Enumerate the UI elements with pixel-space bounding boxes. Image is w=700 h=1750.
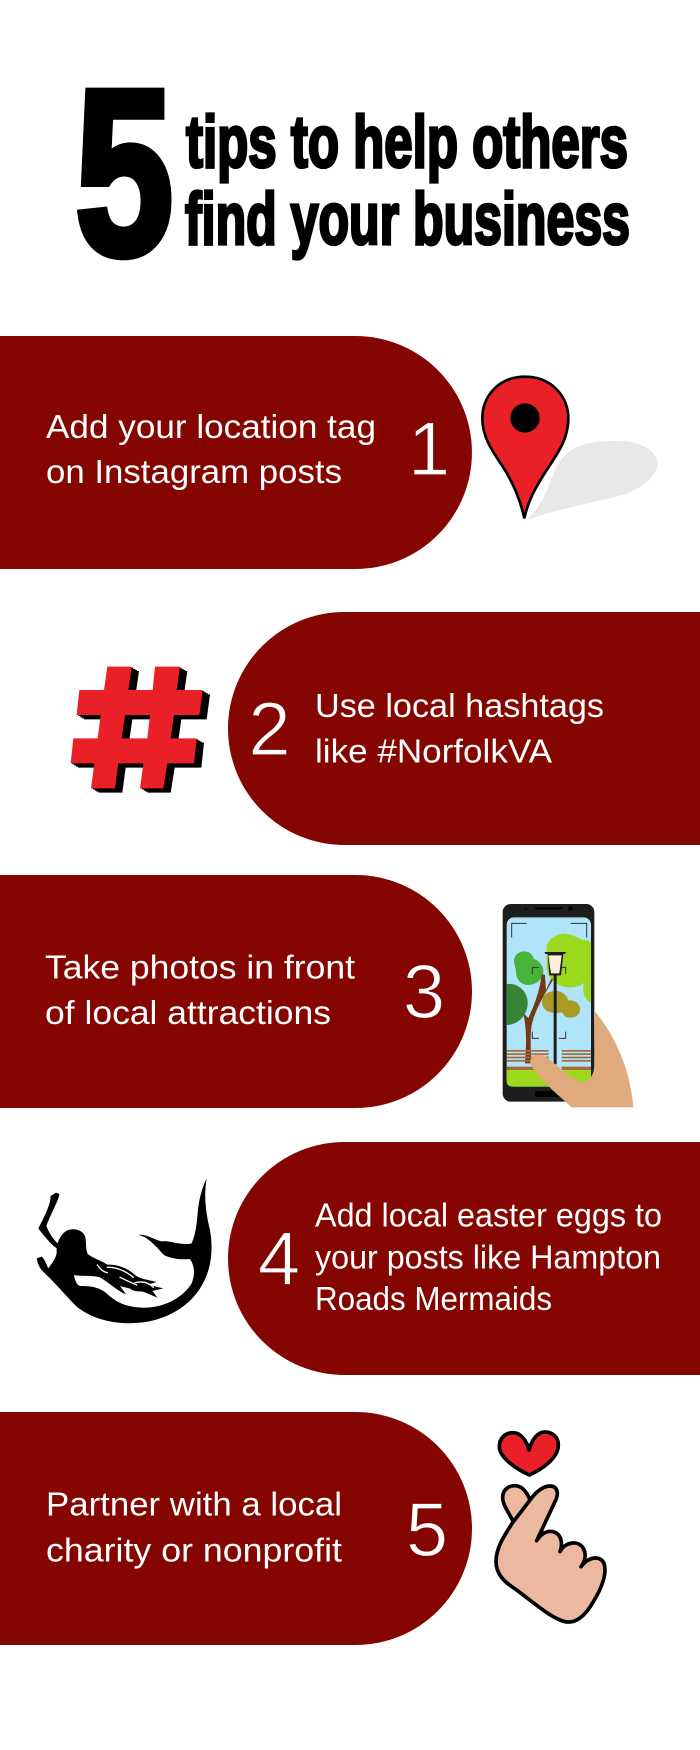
tip 4 text: Roads Mermaids bbox=[315, 1280, 552, 1317]
panel 1: location tag bbox=[0, 336, 472, 569]
tip 1 text: on Instagram posts bbox=[46, 453, 342, 490]
icon: hashtag bbox=[71, 667, 210, 793]
tip 4 text: your posts like Hampton bbox=[315, 1238, 661, 1276]
number 4: 4 bbox=[258, 1217, 300, 1302]
tip 3 text: Take photos in front bbox=[45, 948, 355, 986]
icon: mermaid silhouette bbox=[37, 1178, 212, 1323]
title bbox=[75, 41, 630, 305]
tip 2 text: Use local hashtags bbox=[315, 687, 604, 724]
number 1: 1 bbox=[408, 407, 450, 492]
tip 5 text: charity or nonprofit bbox=[46, 1532, 342, 1568]
panel 5: charity bbox=[0, 1412, 472, 1645]
tip 2 text: like #NorfolkVA bbox=[315, 732, 552, 770]
panel 3: local attractions bbox=[0, 875, 472, 1108]
tip 3 text: of local attractions bbox=[45, 994, 331, 1031]
panel 4: easter eggs bbox=[228, 1142, 700, 1375]
icon: finger heart bbox=[496, 1432, 605, 1622]
icon: map pin bbox=[482, 377, 658, 522]
number 2: 2 bbox=[248, 687, 291, 772]
number 3: 3 bbox=[403, 950, 445, 1035]
tip 1 text: Add your location tag bbox=[46, 408, 376, 445]
number 5: 5 bbox=[406, 1488, 448, 1573]
panel 2: hashtags bbox=[228, 612, 700, 845]
tip 4 text: Add local easter eggs to bbox=[315, 1196, 662, 1234]
icon: phone in hand bbox=[503, 904, 633, 1107]
tip 5 text: Partner with a local bbox=[46, 1486, 342, 1522]
big numeral 5: 5 bbox=[75, 41, 173, 305]
